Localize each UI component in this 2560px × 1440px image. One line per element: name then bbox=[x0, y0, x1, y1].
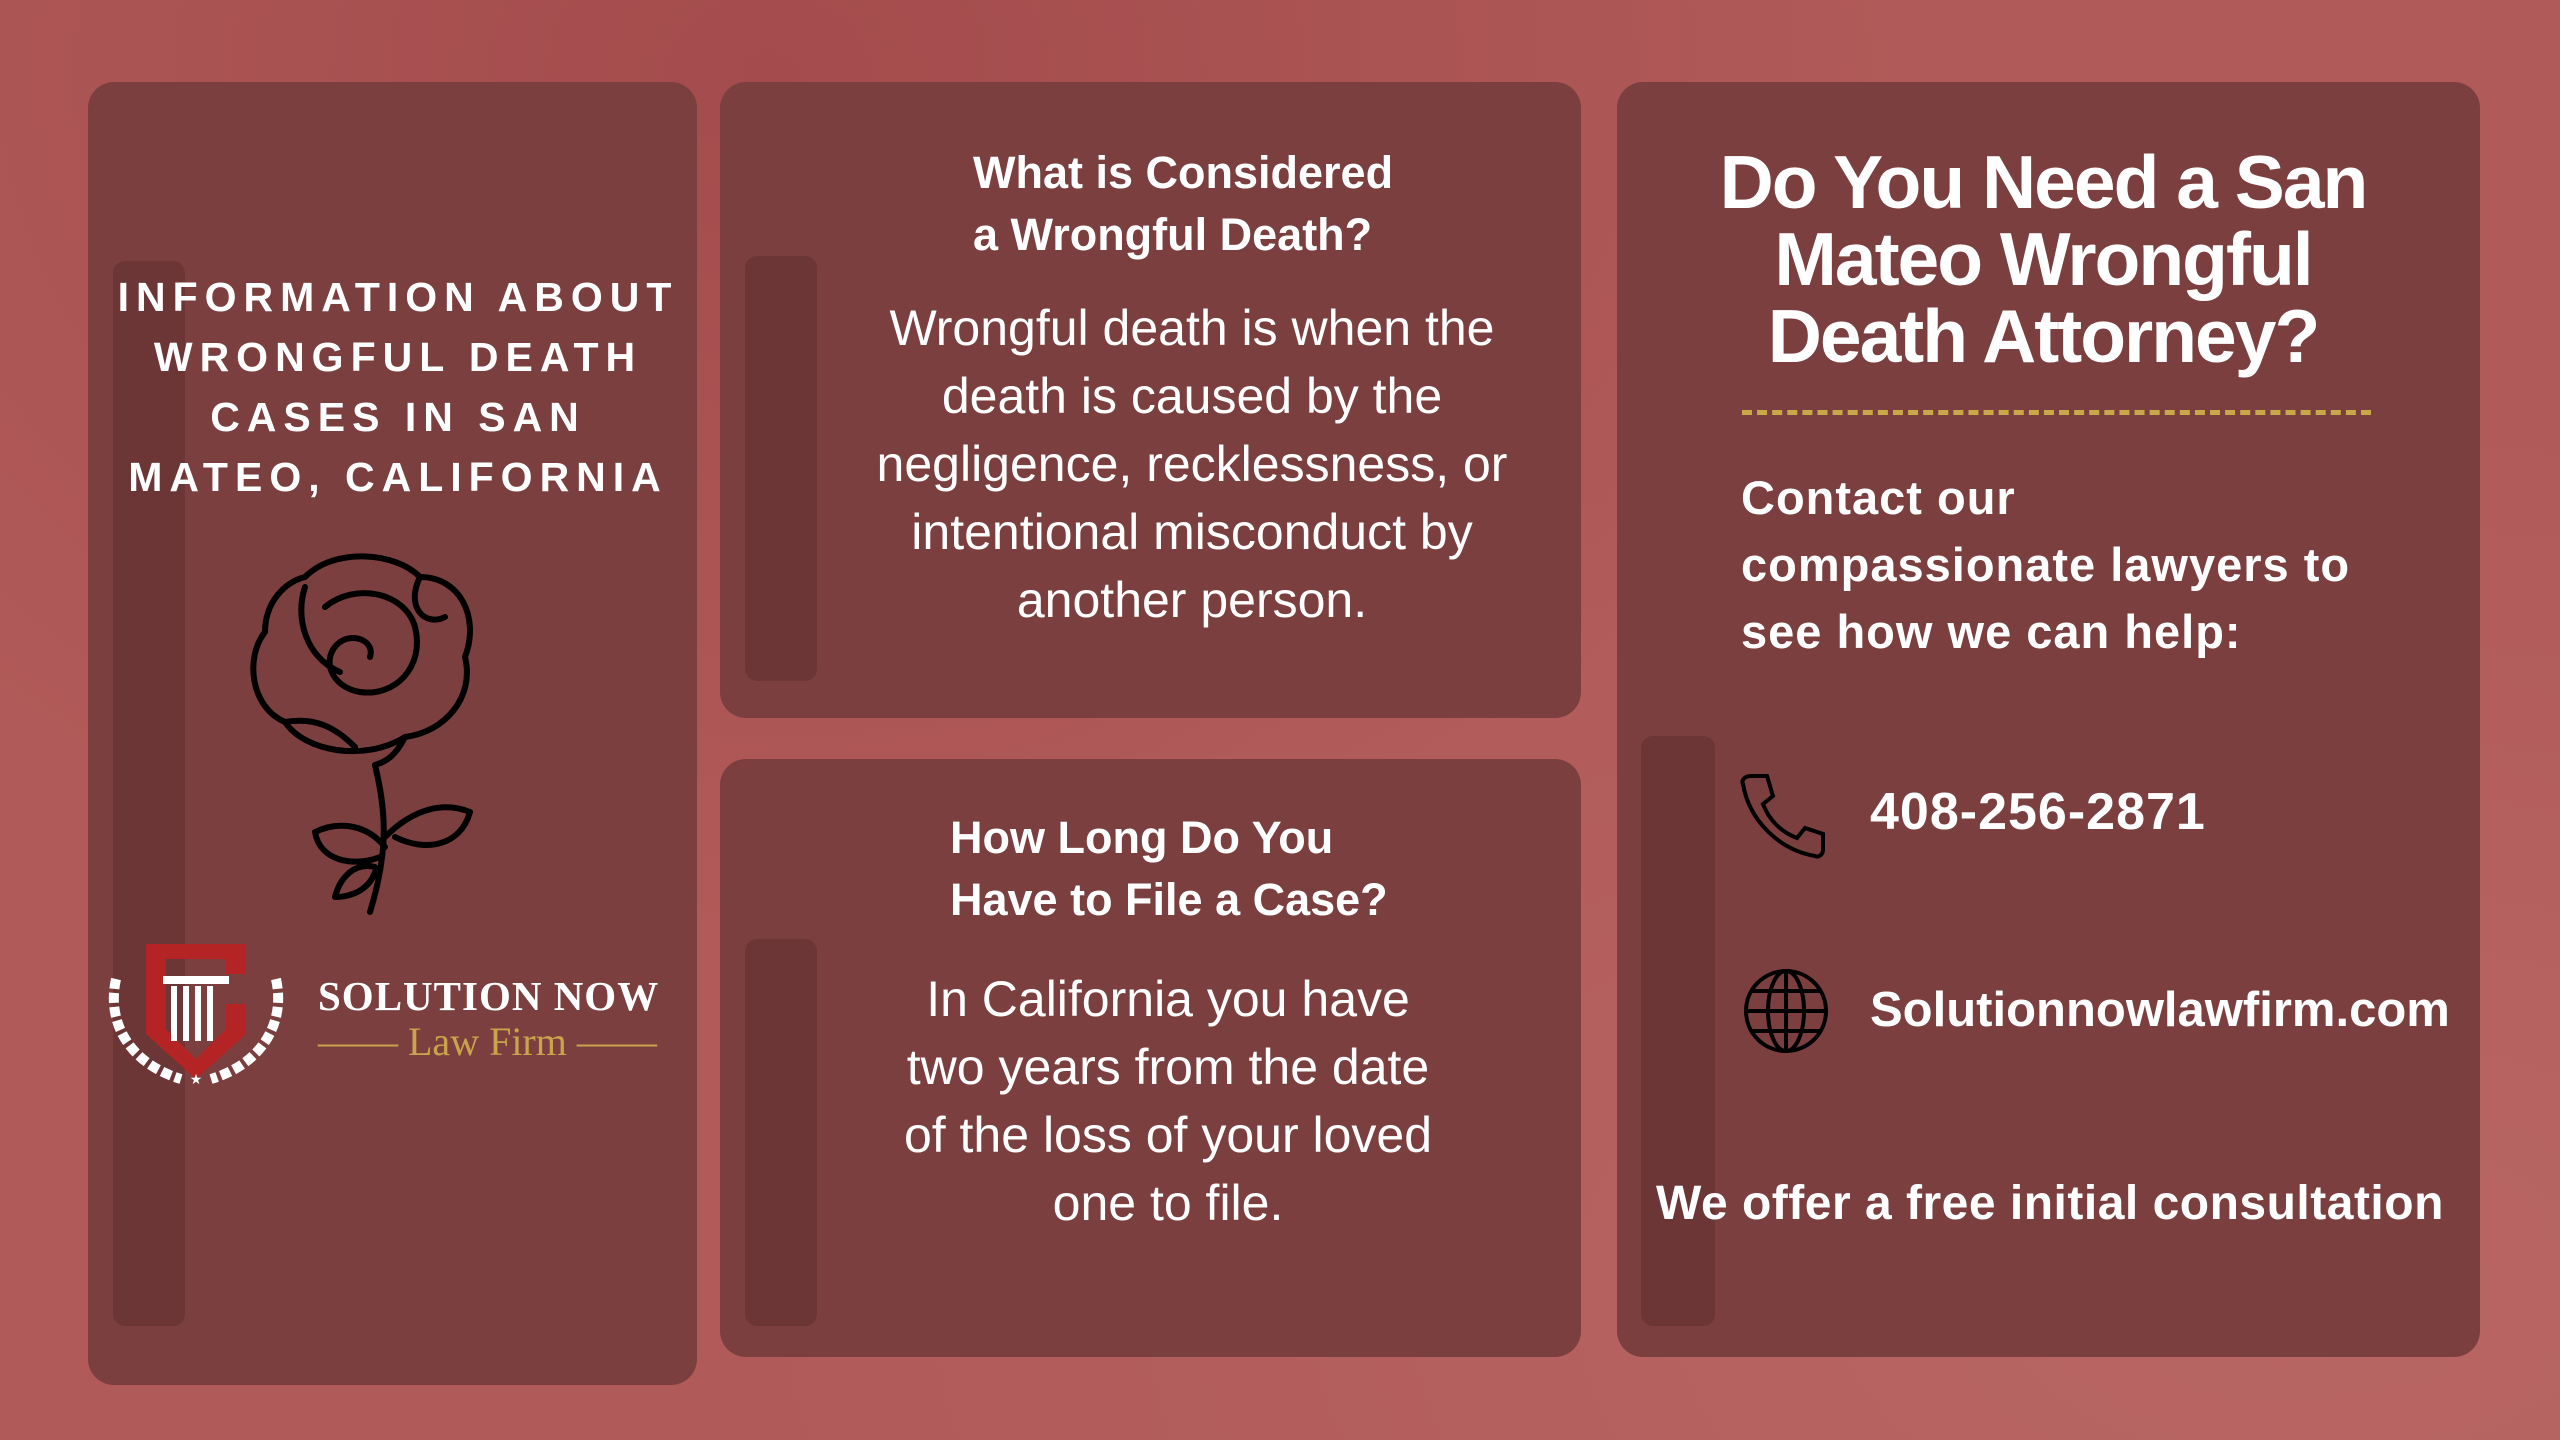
body text: of the loss of your loved bbox=[904, 1107, 1432, 1163]
website: Solutionnowlawfirm.com bbox=[1870, 983, 2450, 1037]
heading bbox=[1720, 140, 2366, 378]
heading bbox=[973, 147, 1393, 260]
icon: rose bbox=[250, 553, 473, 915]
heading: What is Considered bbox=[973, 147, 1393, 198]
heading: Mateo Wrongful bbox=[1774, 217, 2312, 301]
logo: solution now law firm: SOLUTION NOW bbox=[318, 973, 659, 1019]
body text: death is caused by the bbox=[942, 368, 1442, 424]
gold dashed divider bbox=[1742, 410, 2371, 415]
body text: one to file. bbox=[1053, 1175, 1283, 1231]
title: information about wrongful death: CASES IN SAN bbox=[210, 394, 586, 440]
contact text: compassionate lawyers to bbox=[1741, 538, 2350, 591]
title: information about wrongful death bbox=[118, 274, 678, 500]
contact text: Contact our bbox=[1741, 471, 2016, 524]
panel: what is considered a wrongful death bbox=[720, 82, 1581, 718]
heading: Death Attorney? bbox=[1768, 294, 2318, 378]
free consultation note: We offer a free initial consultation bbox=[1656, 1177, 2444, 1230]
panel: contact bbox=[1617, 82, 2480, 1357]
title: information about wrongful death: MATEO, CALIFORNIA bbox=[128, 454, 668, 500]
body text: negligence, recklessness, or bbox=[877, 436, 1507, 492]
heading: a Wrongful Death? bbox=[973, 209, 1372, 260]
heading: How Long Do You bbox=[950, 812, 1333, 863]
heading bbox=[950, 812, 1388, 925]
title: information about wrongful death: INFORMATION ABOUT bbox=[118, 274, 678, 320]
title: information about wrongful death: WRONGFUL DEATH bbox=[154, 334, 642, 380]
logo: solution now law firm bbox=[108, 944, 659, 1084]
heading: Have to File a Case? bbox=[950, 874, 1388, 925]
body text: intentional misconduct by bbox=[911, 504, 1473, 560]
body text: two years from the date bbox=[907, 1039, 1429, 1095]
icon: phone bbox=[1740, 774, 1825, 859]
body text: another person. bbox=[1017, 572, 1367, 628]
panel: left intro bbox=[88, 82, 697, 1385]
body text bbox=[904, 971, 1432, 1231]
icon: globe bbox=[1744, 969, 1828, 1053]
contact text bbox=[1741, 471, 2350, 658]
logo: solution now law firm: —— Law Firm —— bbox=[318, 1019, 657, 1064]
heading: Do You Need a San bbox=[1720, 140, 2366, 224]
body text: Wrongful death is when the bbox=[889, 300, 1494, 356]
phone number: 408-256-2871 bbox=[1870, 783, 2206, 841]
body text: In California you have bbox=[926, 971, 1410, 1027]
body text bbox=[877, 300, 1507, 628]
panel: how long to file bbox=[720, 759, 1581, 1357]
contact text: see how we can help: bbox=[1741, 605, 2242, 658]
